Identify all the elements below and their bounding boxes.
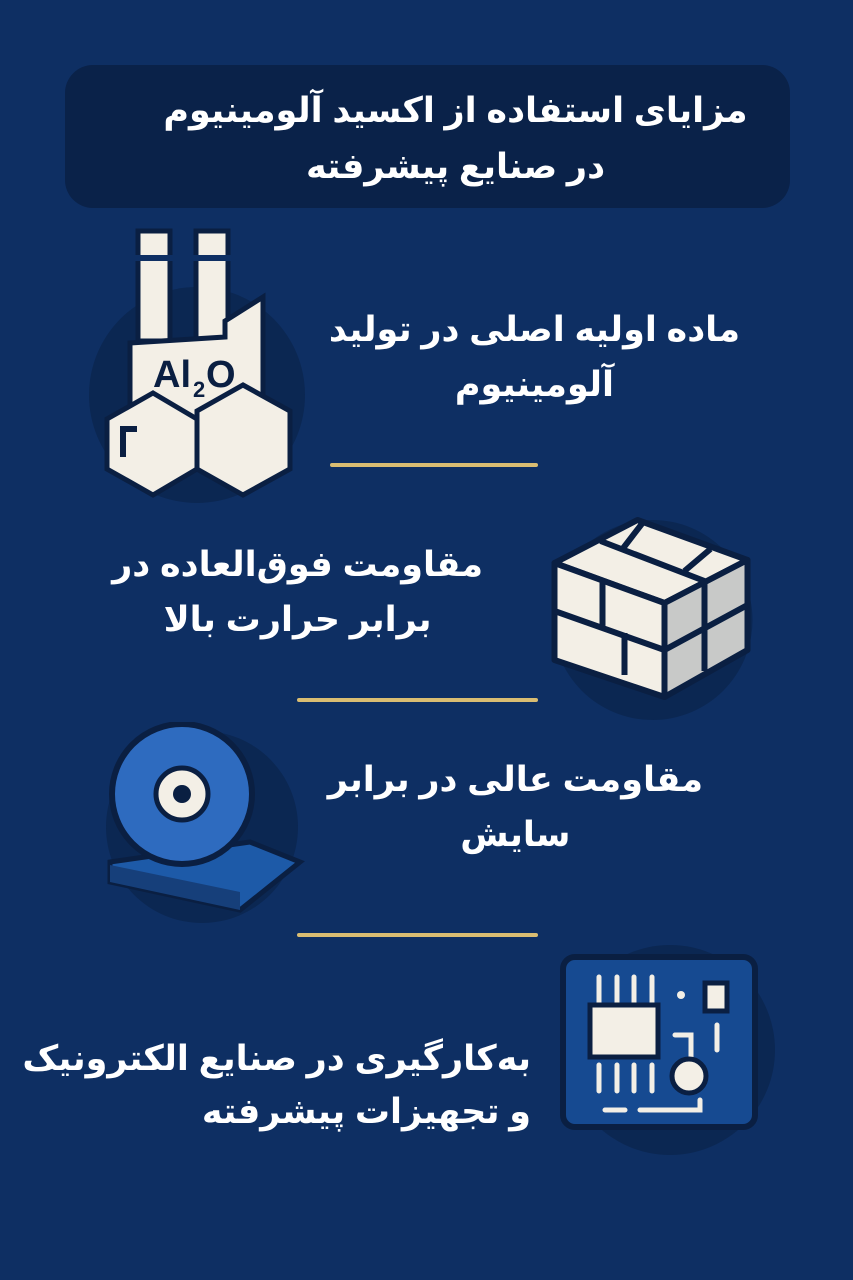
icon: factory Al2O	[89, 228, 305, 503]
text 4: به‌کارگیری در صنایع الکترونیک	[22, 1039, 531, 1078]
text 4: و تجهیزات پیشرفته	[202, 1092, 531, 1131]
title: مزایای استفاده از اکسید آلومینیوم	[163, 91, 748, 130]
text 3	[326, 760, 703, 854]
title	[163, 88, 748, 187]
title: در صنایع پیشرفته	[306, 147, 605, 186]
icon: grinding disc	[106, 722, 305, 923]
text 1	[329, 310, 740, 405]
text 1: ماده اولیه اصلی در تولید	[329, 310, 740, 349]
text 2: مقاومت فوق‌العاده در	[112, 545, 483, 584]
title box	[65, 65, 790, 208]
text 3: سایش	[460, 815, 570, 854]
icon: factory Al2O: 2	[193, 377, 205, 402]
text 1: آلومینیوم	[455, 365, 614, 404]
text 4	[22, 1038, 531, 1132]
icon: bricks cube	[552, 517, 752, 720]
icon: factory Al2O: Al	[153, 354, 191, 396]
text 3: مقاومت عالی در برابر	[328, 760, 703, 799]
text 2: برابر حرارت بالا	[164, 600, 432, 639]
text 2	[110, 545, 483, 640]
icon: circuit board	[560, 945, 775, 1155]
icon: factory Al2O: O	[206, 354, 236, 396]
